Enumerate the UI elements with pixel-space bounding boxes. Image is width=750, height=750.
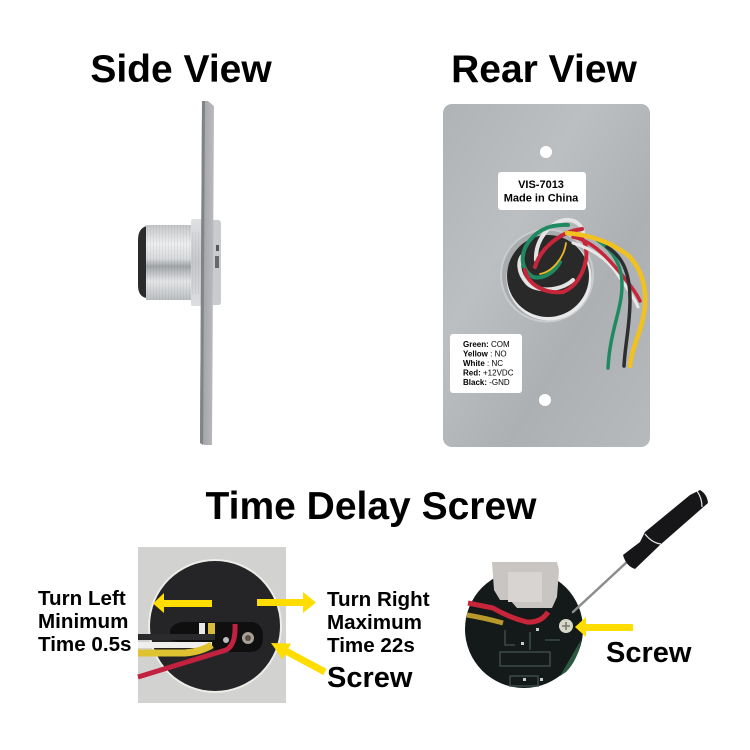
text: turn right: Time 22s	[327, 634, 415, 657]
arrow: to screw	[271, 643, 327, 675]
wire tails	[573, 243, 638, 307]
trimmer screw	[559, 619, 573, 633]
text: turn left: Turn Left	[38, 587, 126, 610]
arrow: turn left	[153, 593, 212, 613]
wire bundle	[519, 220, 645, 368]
heading: Side View: Side View	[90, 48, 272, 91]
label: wire colours: White : NC	[463, 359, 503, 368]
label: wire colours: Yellow : NO	[463, 350, 507, 358]
board traces	[500, 630, 560, 686]
wires	[138, 624, 235, 677]
screw	[242, 632, 254, 644]
wires	[467, 615, 503, 623]
wire slot	[170, 622, 263, 652]
arrow: turn right	[257, 592, 316, 613]
label: model: Made in China	[504, 192, 579, 204]
heading: Time Delay Screw: Time Delay Screw	[206, 485, 537, 528]
label: model: VIS-7013	[518, 179, 564, 191]
metal plate	[443, 104, 650, 447]
text: turn left: Time 0.5s	[38, 633, 132, 656]
text: turn left	[38, 587, 132, 656]
mounting hole top	[540, 146, 552, 158]
text: screw right: Screw	[606, 637, 692, 669]
label: wire colours: Red: +12VDC	[463, 368, 514, 378]
mounting hole bottom	[539, 394, 551, 406]
text: turn right: Maximum	[327, 611, 422, 634]
text: turn right	[327, 588, 430, 657]
text: turn left: Minimum	[38, 610, 128, 633]
product photo: side view of button	[138, 101, 221, 445]
label: wire colours: Black: -GND	[463, 378, 510, 387]
heading: Rear View: Rear View	[451, 48, 638, 91]
text: screw left: Screw	[327, 662, 413, 694]
label: model	[498, 172, 586, 210]
white connector	[492, 562, 559, 608]
photo: button rear with delay screw	[138, 547, 286, 703]
arrow: to trimmer screw	[575, 617, 633, 637]
icon: screwdriver	[573, 490, 708, 612]
label: wire colours: Green: COM	[463, 340, 510, 349]
product photo: rear view of plate	[443, 104, 650, 447]
label: wire colours	[450, 334, 522, 393]
photo: circuit board	[465, 562, 583, 688]
text: turn right: Turn Right	[327, 588, 430, 611]
button housing	[500, 228, 594, 322]
